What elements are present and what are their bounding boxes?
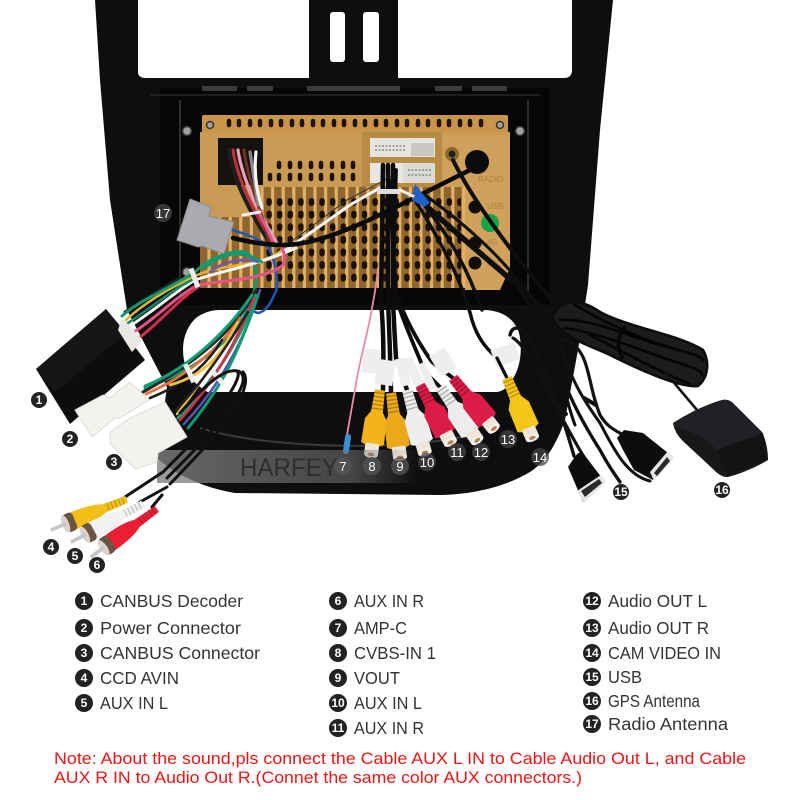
callout 4: 4 bbox=[48, 540, 55, 554]
blue cable clip bbox=[412, 184, 430, 207]
callout 3: 3 bbox=[111, 455, 118, 469]
legend: 11 AUX IN R: AUX IN R bbox=[354, 718, 424, 738]
top strip vent holes bbox=[229, 121, 481, 125]
panel: black dashboard frame bbox=[95, 0, 613, 495]
callout 8 bbox=[363, 457, 381, 475]
legend: 15 USB bbox=[583, 667, 642, 687]
connector labels: white tags bbox=[362, 342, 520, 390]
unit port labels: 4G bbox=[487, 238, 498, 247]
callout 17: 17 bbox=[156, 206, 170, 221]
legend: 4 CCD AVIN: 4 bbox=[81, 671, 88, 685]
cable: GPS and USB leads over unit bbox=[412, 160, 620, 482]
legend: 17 Radio Antenna: 17 bbox=[585, 717, 599, 731]
gray radio antenna adapter connector 17 bbox=[177, 199, 234, 254]
callout 6: 6 bbox=[94, 558, 101, 572]
legend: 12 Audio OUT L: 12 bbox=[585, 594, 599, 608]
callout 11 bbox=[448, 443, 466, 461]
mounting screws bbox=[182, 122, 524, 276]
USB connector left bbox=[568, 453, 606, 503]
unit port labels bbox=[478, 175, 504, 268]
note text: AUX R IN to Audio Out R.(Connet the same color AUX connectors.) bbox=[54, 768, 582, 787]
legend: 8 CVBS-IN 1: 8 bbox=[335, 646, 342, 660]
legend: 3 CANBUS Connector: 3 bbox=[81, 646, 88, 660]
long white wires from rear socket bbox=[283, 178, 397, 252]
callout 9: 9 bbox=[396, 459, 404, 474]
middle block vent holes bbox=[270, 163, 353, 179]
callout 13 bbox=[499, 430, 517, 448]
legend column 1 bbox=[75, 591, 260, 713]
callout 6 bbox=[89, 557, 105, 573]
callout 8: 8 bbox=[368, 459, 376, 474]
legend: 2 Power Connector: Power Connector bbox=[100, 618, 241, 638]
white connector sockets bbox=[370, 138, 435, 183]
radio antenna socket and GPS socket bbox=[445, 147, 489, 174]
callout 2: 2 bbox=[67, 432, 74, 446]
RCA plugs 8 to 14 bbox=[359, 371, 544, 463]
cable: radio antenna lead bbox=[233, 166, 478, 245]
legend: 7 AMP-C: AMP-C bbox=[354, 618, 407, 638]
legend column 3 bbox=[583, 591, 728, 734]
legend: 5 AUX IN L: AUX IN L bbox=[100, 693, 168, 713]
watermark band bbox=[157, 450, 419, 483]
legend: 16 GPS Antenna: GPS Antenna bbox=[608, 691, 700, 711]
callout 17 bbox=[154, 204, 172, 222]
connector 1: CANBUS decoder box bbox=[36, 309, 145, 424]
legend: 11 AUX IN R: 11 bbox=[332, 721, 345, 735]
upper harness bundle bbox=[125, 278, 180, 312]
legend: 9 VOUT: 9 bbox=[335, 671, 342, 685]
callout 9 bbox=[391, 457, 409, 475]
legend: 6 AUX IN R bbox=[329, 591, 424, 611]
unit port labels: RADIO bbox=[478, 175, 503, 184]
legend: 15 USB: USB bbox=[608, 667, 642, 687]
legend: 16 GPS Antenna: 16 bbox=[585, 694, 599, 708]
legend: 5 AUX IN L bbox=[75, 693, 168, 713]
legend: 10 AUX IN L: AUX IN L bbox=[354, 693, 422, 713]
legend: 9 VOUT: VOUT bbox=[354, 668, 400, 688]
callout 10 bbox=[418, 453, 436, 471]
callout 11: 11 bbox=[450, 445, 464, 460]
unit port labels: GPS bbox=[487, 259, 504, 268]
legend: 7 AMP-C bbox=[329, 618, 407, 638]
callout 15: 15 bbox=[614, 485, 628, 499]
note text: Note: About the sound,pls connect the Cable AUX L IN to Cable Audio Out L, and Cable bbox=[54, 749, 746, 768]
callout 12 bbox=[472, 443, 490, 461]
note text bbox=[54, 749, 746, 787]
legend: 3 CANBUS Connector: CANBUS Connector bbox=[100, 643, 260, 663]
callout 5: 5 bbox=[72, 549, 79, 563]
legend: 4 CCD AVIN: CCD AVIN bbox=[100, 668, 179, 688]
legend: 14 CAM VIDEO IN: CAM VIDEO IN bbox=[608, 643, 721, 663]
callout 16: 16 bbox=[715, 483, 729, 497]
legend: 10 AUX IN L bbox=[329, 693, 422, 713]
legend: 10 AUX IN L: 10 bbox=[331, 696, 345, 710]
GPS antenna cable coil bbox=[552, 302, 707, 410]
connector 3: CANBUS connector bbox=[110, 402, 187, 469]
legend: 12 Audio OUT L: Audio OUT L bbox=[608, 591, 707, 611]
legend: 7 AMP-C: 7 bbox=[335, 621, 342, 635]
callout numbers bbox=[31, 204, 730, 573]
legend: 9 VOUT bbox=[329, 668, 400, 688]
cable: camera lead to plug 14 bbox=[497, 358, 507, 378]
cable: central black RCA bundle bbox=[377, 165, 453, 392]
legend: 1 CANBUS Decoder: 1 bbox=[81, 594, 88, 608]
callout 1 bbox=[31, 392, 47, 408]
legend: 5 AUX IN L: 5 bbox=[81, 696, 88, 710]
callout 4 bbox=[43, 539, 59, 555]
unit port labels: USB bbox=[487, 202, 503, 211]
callout 1: 1 bbox=[36, 393, 43, 407]
wire tie on socket leads bbox=[243, 212, 260, 215]
wire ties bbox=[189, 268, 200, 288]
legend: 6 AUX IN R: 6 bbox=[335, 594, 342, 608]
USB connector right bbox=[617, 430, 674, 481]
wires: power harness from socket to connectors bbox=[122, 150, 397, 428]
legend: 15 USB: 15 bbox=[585, 670, 599, 684]
legend: 14 CAM VIDEO IN: 14 bbox=[585, 646, 599, 660]
callout 5 bbox=[67, 548, 83, 564]
legend: 8 CVBS-IN 1: CVBS-IN 1 bbox=[354, 643, 436, 663]
wire: pink AMP-C lead bbox=[343, 270, 378, 454]
callout 10: 10 bbox=[420, 455, 434, 470]
legend: 17 Radio Antenna: Radio Antenna bbox=[608, 714, 728, 734]
legend: 13 Audio OUT R: 13 bbox=[585, 621, 599, 635]
connector 2: power connector bbox=[75, 382, 149, 437]
GPS antenna puck bbox=[673, 400, 768, 477]
legend: 1 CANBUS Decoder: CANBUS Decoder bbox=[100, 591, 243, 611]
legend: 13 Audio OUT R: Audio OUT R bbox=[608, 618, 709, 638]
callout 12: 12 bbox=[474, 445, 488, 460]
callout 13: 13 bbox=[501, 432, 515, 447]
legend: 11 AUX IN R bbox=[329, 718, 424, 738]
callout 3 bbox=[106, 454, 122, 470]
callout 14 bbox=[531, 448, 549, 466]
callout 7 bbox=[334, 457, 352, 475]
lower harness bundles bbox=[143, 290, 256, 392]
callout 14: 14 bbox=[533, 450, 547, 465]
watermark text: HARFEY bbox=[240, 454, 338, 482]
legend column 2 bbox=[329, 591, 436, 738]
AUX cable loop to RCA plugs bbox=[125, 371, 246, 507]
callout 7: 7 bbox=[339, 459, 347, 474]
panel: golden head unit back bbox=[182, 115, 524, 290]
legend: 2 Power Connector: 2 bbox=[81, 621, 88, 635]
legend: 6 AUX IN R: AUX IN R bbox=[354, 591, 424, 611]
RCA plugs 4 to 6 bbox=[47, 490, 163, 565]
right side holes and green badge bbox=[468, 200, 499, 270]
USB extension cables bbox=[510, 328, 650, 481]
callout 2 bbox=[62, 431, 78, 447]
